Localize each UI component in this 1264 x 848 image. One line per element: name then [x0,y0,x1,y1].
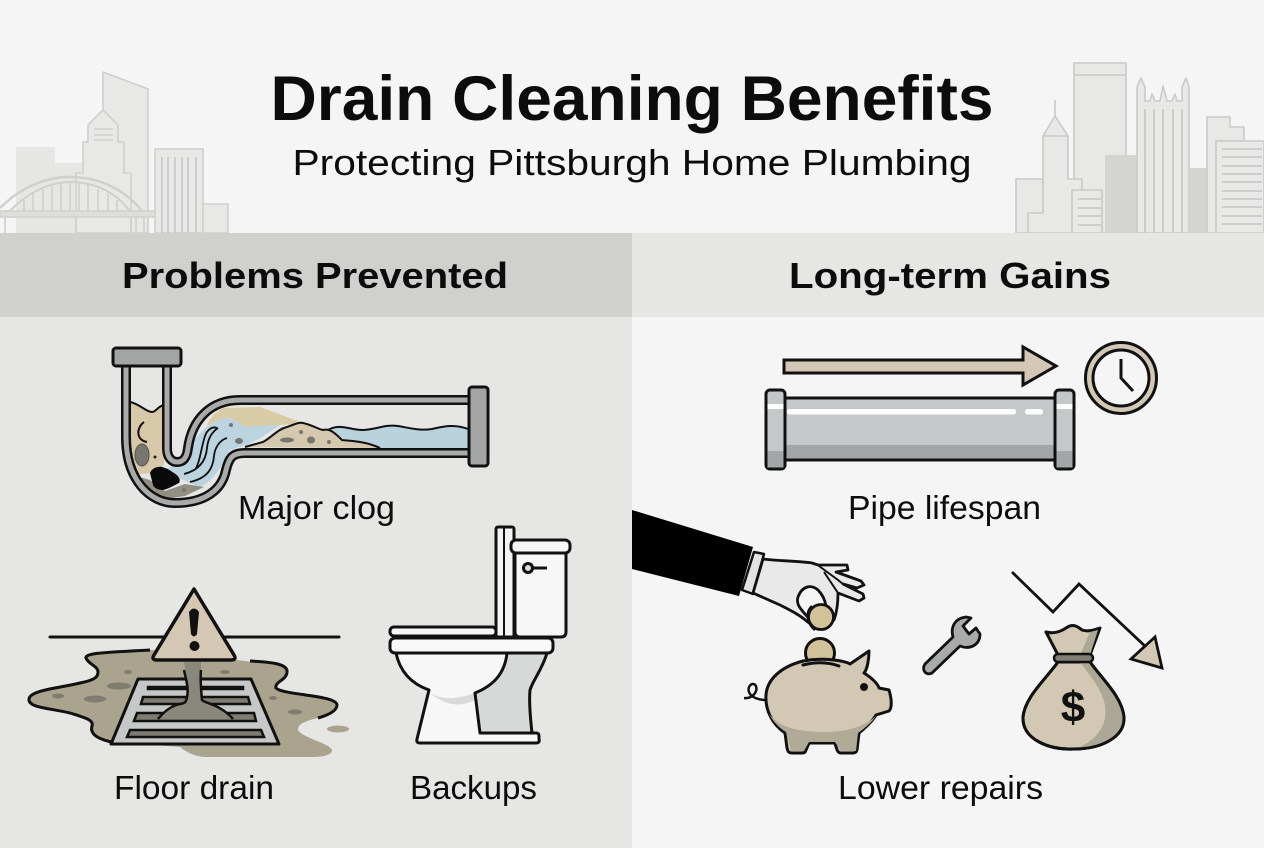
skyline: left with bridge [0,72,228,233]
panel: problems prevented [0,233,632,848]
label: backups: Backups [410,769,537,806]
dollar sign: $ [1061,683,1085,732]
icon: pipe [766,390,1074,469]
label: lower repairs: Lower repairs [838,769,1043,806]
heading: problems prevented: Problems Prevented [122,255,508,296]
subtitle: Protecting Pittsburgh Home Plumbing [292,142,972,183]
icon: lifespan arrow [784,347,1056,385]
title: Drain Cleaning Benefits [270,64,994,134]
label: major clog: Major clog [238,489,395,526]
skyline: right with towers [1016,63,1264,233]
icon: piggy bank [744,638,891,753]
panel: long-term gains [632,233,1264,848]
icon: money bag [1023,626,1124,749]
label: floor drain: Floor drain [114,769,274,806]
icon: falling cost arrow [1012,572,1162,668]
icon: clogged p-trap pipe [113,348,488,503]
label: pipe lifespan: Pipe lifespan [848,489,1041,526]
icon: wrench [924,617,980,674]
heading: long-term gains: Long-term Gains [789,255,1111,296]
icon: floor drain overflow with warning [29,589,349,757]
icon: clock [1086,342,1156,414]
icon: warning triangle [153,589,235,660]
icon: toilet [390,527,570,743]
icon: hand dropping coin [632,510,864,630]
